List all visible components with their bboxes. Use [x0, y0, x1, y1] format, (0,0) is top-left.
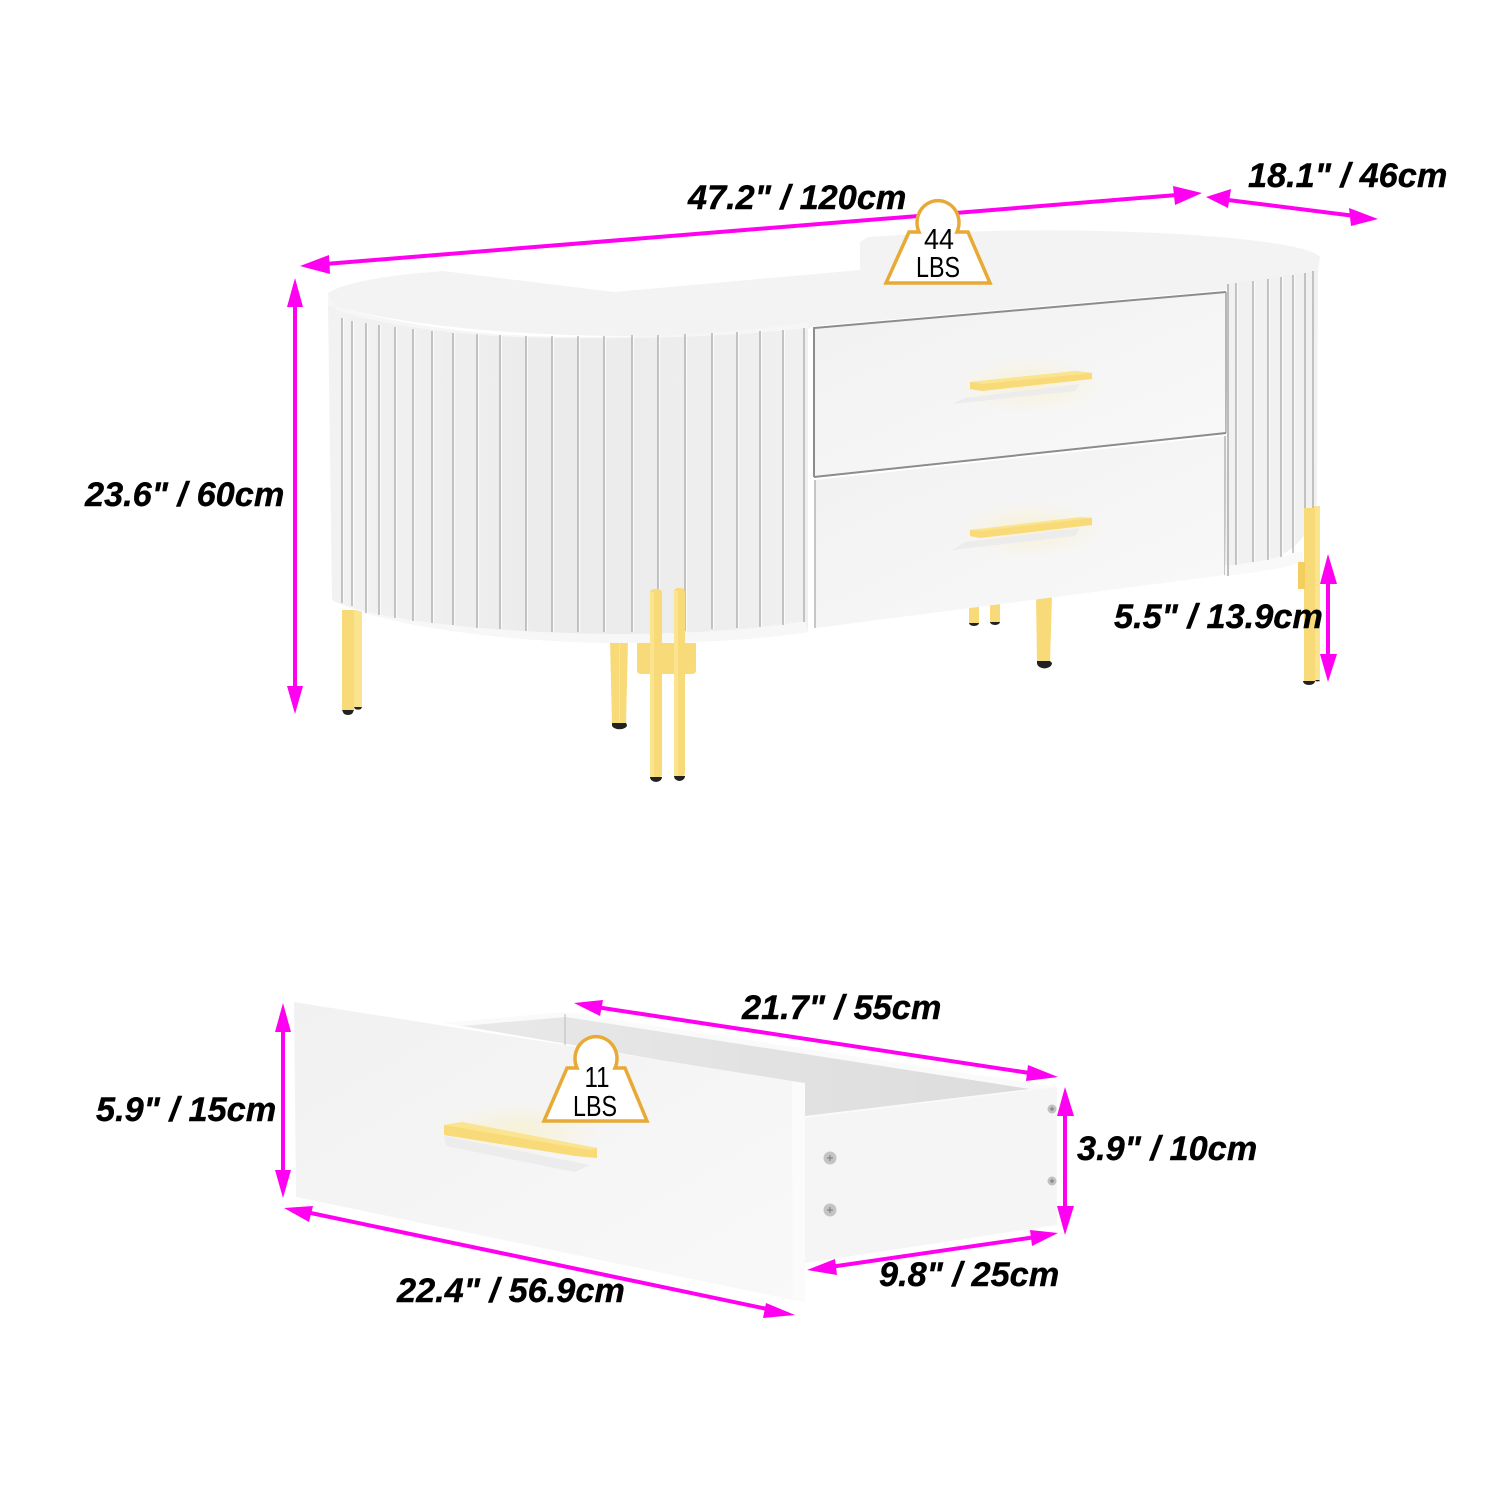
cabinet top surface: [328, 230, 1320, 336]
label: drawer front height: 5.9" / 15cm: [96, 1091, 276, 1129]
arrow: drawer side width: [807, 1230, 1058, 1275]
label: cabinet width: 47.2" / 120cm: [687, 179, 906, 217]
arrow: drawer side height: [1057, 1087, 1074, 1235]
dimension labels: [84, 157, 1447, 1310]
arrow: cabinet height: [287, 278, 303, 714]
label: drawer side width: 9.8" / 25cm: [879, 1256, 1059, 1294]
label: drawer front width: 22.4" / 56.9cm: [396, 1272, 625, 1310]
drawer 2: [815, 436, 1225, 628]
handle: drawer front: [435, 1102, 605, 1172]
dimension arrows: [275, 186, 1378, 1318]
label: drawer inner depth: 21.7" / 55cm: [741, 989, 941, 1027]
left fluted cabinet panel: [328, 293, 808, 643]
drawer side panel: [805, 1087, 1057, 1263]
arrow: leg height: [1320, 554, 1337, 682]
arrow: drawer front width: [284, 1206, 795, 1318]
right front legs: [1298, 506, 1320, 685]
right fluted cabinet panel: [1225, 270, 1318, 576]
icon: 44 lbs weight: [886, 201, 990, 284]
arrow: cabinet width: [300, 186, 1202, 274]
label: cabinet depth: 18.1" / 46cm: [1248, 157, 1447, 195]
icon: 11 lbs weight: [544, 1037, 647, 1123]
front legs and bracket: [637, 588, 696, 782]
drawer front panel: [294, 1002, 805, 1302]
screws: [824, 1104, 1056, 1216]
drawer interior: [443, 1012, 1057, 1118]
handle: drawer 2: [952, 502, 1105, 558]
label: leg height: 5.5" / 13.9cm: [1114, 598, 1323, 636]
icon: 44 lbs weight: LBS: [916, 252, 960, 284]
handle: drawer 1: [952, 357, 1105, 413]
label: cabinet height: 23.6" / 60cm: [84, 476, 284, 514]
arrow: cabinet depth: [1206, 189, 1378, 226]
icon: 11 lbs weight: LBS: [573, 1091, 617, 1123]
arrow: drawer front height: [275, 1003, 291, 1198]
icon: 11 lbs weight: 11: [584, 1062, 610, 1094]
label: drawer side height: 3.9" / 10cm: [1077, 1130, 1257, 1168]
arrow: drawer inner depth: [574, 1000, 1058, 1081]
back legs of cabinet: [342, 595, 1052, 729]
drawer 1: [814, 292, 1226, 477]
icon: 44 lbs weight: 44: [924, 224, 954, 256]
drawer illustration: [294, 1002, 1057, 1302]
